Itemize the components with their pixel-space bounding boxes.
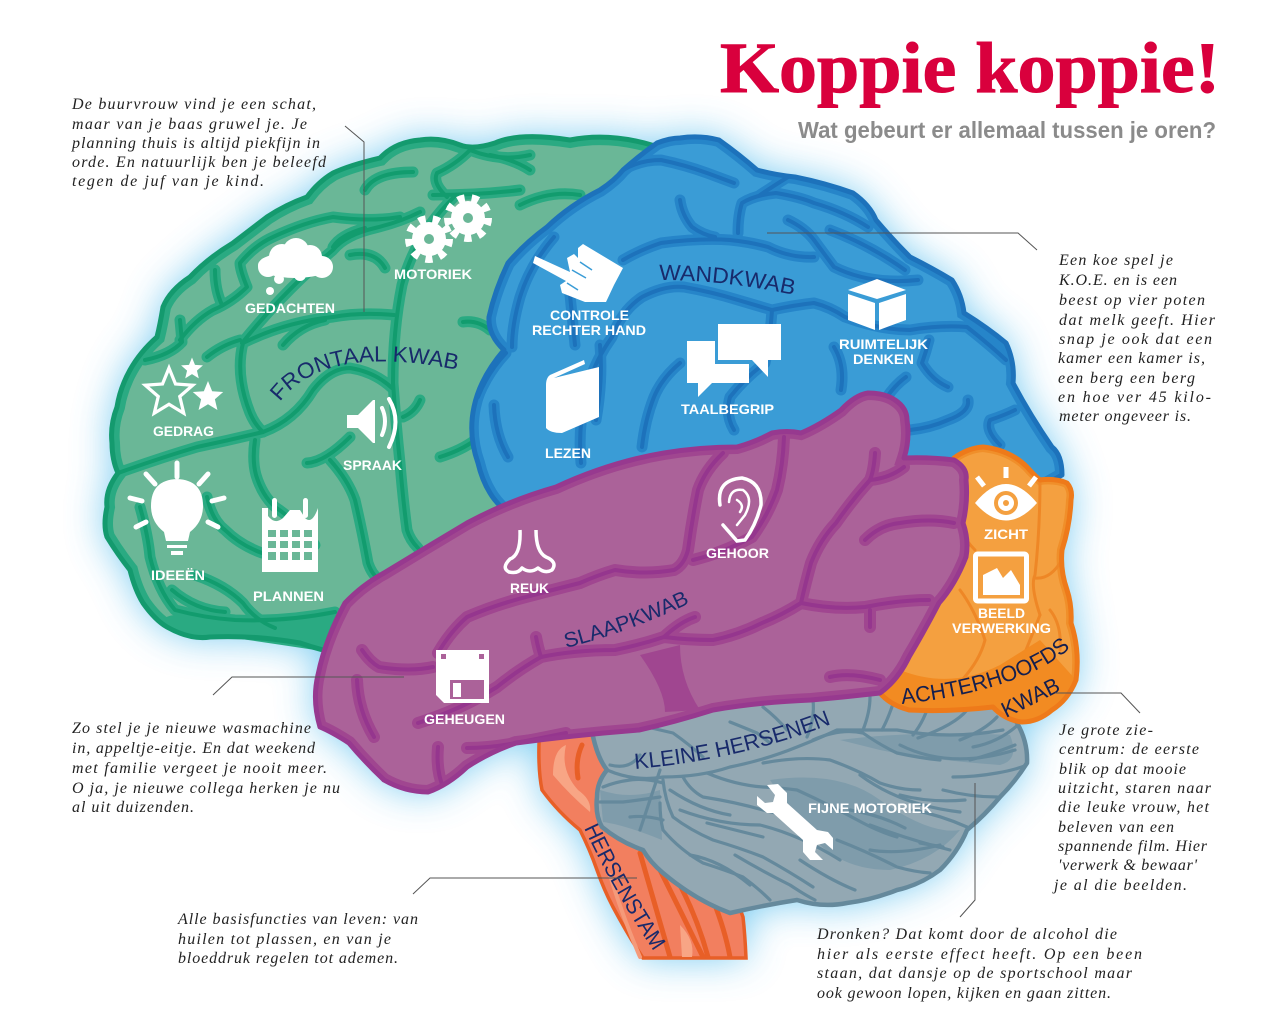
text block: slaapkwab: met familie vergeet je nooit meer. [72,760,327,777]
label: beeld verwerking: BEELD [978,605,1025,621]
label: zicht: ZICHT [984,526,1028,542]
panel: kleine hersenen [590,696,1030,916]
arrow: leader frontaalkwab [345,126,364,312]
text block: kleine hersenen: hier als eerste effect heeft. Op een been [817,946,1142,963]
icon: gedachtewolk [258,238,333,295]
text block: slaapkwab: Zo stel je je nieuwe wasmachine [72,720,311,737]
label: reuk: REUK [510,580,549,596]
label: wandkwab: WANDKWAB [659,264,794,294]
label: lezen: LEZEN [545,445,591,461]
text block: wandkwab [1058,252,1216,425]
text block: achterhoofdskwab [1052,722,1212,894]
label: kwab: KWAB [1000,679,1060,718]
label: ruimtelijk denken [839,336,928,367]
text block: achterhoofdskwab: 'verwerk & bewaar' [1058,857,1198,874]
icon: sterren [145,358,223,413]
arrow: leader achterhoofdskwab [1055,693,1140,713]
label: beeld verwerking [952,605,1051,636]
label: ruimtelijk denken: RUIMTELIJK [839,336,928,352]
text block: wandkwab: snap je ook dat een [1059,331,1212,348]
text block: frontaalkwab: tegen de juf van je kind. [72,173,264,190]
text block: achterhoofdskwab: centrum: de eerste [1059,741,1199,758]
label: gehoor: GEHOOR [706,545,769,561]
label: motoriek: MOTORIEK [394,266,472,282]
icon: moersleutel [757,784,833,860]
text block: hersenstam: huilen tot plassen, en van je [178,931,391,948]
panel: slaapkwab [312,390,970,794]
text block: wandkwab: K.O.E. en is een [1058,272,1177,289]
panel: achterhoofdskwab [879,444,1080,724]
panel: frontaalkwab [102,134,654,652]
text block: kleine hersenen [816,926,1142,1002]
text block: wandkwab: meter ongeveer is. [1059,408,1191,425]
label: achterhoofds: ACHTERHOOFDS [902,638,1068,704]
panel: hersenstam [537,736,748,960]
icon: kubus [848,279,906,330]
icon: afbeelding [976,554,1026,601]
label: taalbegrip: TAALBEGRIP [681,401,774,417]
panel: wandkwab [469,134,1064,506]
text block: frontaalkwab: De buurvrouw vind je een schat, [71,96,316,113]
text block: frontaalkwab [71,96,327,190]
arrow: leader slaapkwab [213,677,404,695]
icon: luidspreker [347,399,396,447]
icon: kalender [262,498,318,572]
text block: wandkwab: en hoe ver 45 kilo- [1058,389,1211,406]
icon: boek [546,360,599,433]
label: gedachten: GEDACHTEN [245,300,335,316]
arrow: leader wandkwab [767,233,1037,250]
label: controle rechter hand: CONTROLE [550,307,629,323]
text block: kleine hersenen: staan, dat dansje op de sportschool maar [817,965,1133,982]
text block: wandkwab: beest op vier poten [1059,292,1205,309]
label: controle rechter hand: RECHTER HAND [532,322,646,338]
icon: tekstballonnen [687,324,781,397]
text block: slaapkwab: al uit duizenden. [72,799,194,816]
text block: achterhoofdskwab: je al die beelden. [1052,877,1187,894]
icon: wijzende hand [533,244,623,302]
icon: oor [719,478,761,541]
label: gedrag: GEDRAG [153,423,214,439]
text block: achterhoofdskwab: blik op dat mooie [1059,761,1186,778]
text block: kleine hersenen: ook gewoon lopen, kijken en gaan zitten. [817,985,1111,1002]
text block: achterhoofdskwab: uitzicht, staren naar [1058,780,1212,797]
icon: gloeilamp [130,463,224,555]
label: plannen: PLANNEN [253,588,324,604]
label: ruimtelijk denken: DENKEN [853,351,914,367]
text block: achterhoofdskwab: spannende film. Hier [1058,838,1208,855]
arrow: leader kleine hersenen [960,783,975,917]
arrow: leader hersenstam [413,878,637,894]
text block: achterhoofdskwab: die leuke vrouw, het [1058,799,1210,816]
text block: wandkwab: een berg een berg [1058,370,1195,387]
label: fijne motoriek: FIJNE MOTORIEK [808,800,932,816]
text block: slaapkwab [72,720,340,816]
text block: wandkwab: dat melk geeft. Hier [1059,312,1216,329]
text block: slaapkwab: in, appeltje-eitje. En dat weekend [72,740,316,757]
label: spraak: SPRAAK [343,457,402,473]
text block: achterhoofdskwab: Je grote zie- [1059,722,1153,739]
text block: hersenstam: bloeddruk regelen tot ademen. [178,950,398,967]
icon: oog [975,467,1037,520]
text block: hersenstam: Alle basisfuncties van leven: van [177,911,418,928]
label: slaapkwab: SLAAPKWAB [564,592,688,647]
brain glow [105,137,1077,958]
text block: frontaalkwab: planning thuis is altijd piekfijn in [71,135,320,152]
icon: tandwielen [409,198,488,259]
label: frontaal kwab: FRONTAAL KWAB [270,346,458,400]
label: hersenstam: HERSENSTAM [584,823,666,950]
text block: frontaalkwab: maar van je baas gruwel je. Je [72,116,307,133]
text block: wandkwab: kamer een kamer is, [1058,350,1205,367]
text block: hersenstam [177,911,418,967]
icon: neus [505,530,554,572]
label: beeld verwerking: VERWERKING [952,620,1051,636]
text block: achterhoofdskwab: beleven van een [1058,819,1174,836]
text block: slaapkwab: O ja, je nieuwe collega herken je nu [72,780,340,797]
title: Koppie koppie! [720,28,1220,108]
label: kleine hersenen: KLEINE HERSENEN [635,710,830,769]
text block: kleine hersenen: Dronken? Dat komt door de alcohol die [816,926,1117,943]
subtitle: Wat gebeurt er allemaal tussen je oren? [798,117,1216,143]
label: controle rechter hand [532,307,646,338]
label: geheugen: GEHEUGEN [424,711,505,727]
text block: wandkwab: Een koe spel je [1058,252,1173,269]
text block: frontaalkwab: orde. En natuurlijk ben je beleefd [72,154,327,171]
label: ideeen: IDEEËN [151,567,205,583]
icon: diskette [436,650,489,703]
